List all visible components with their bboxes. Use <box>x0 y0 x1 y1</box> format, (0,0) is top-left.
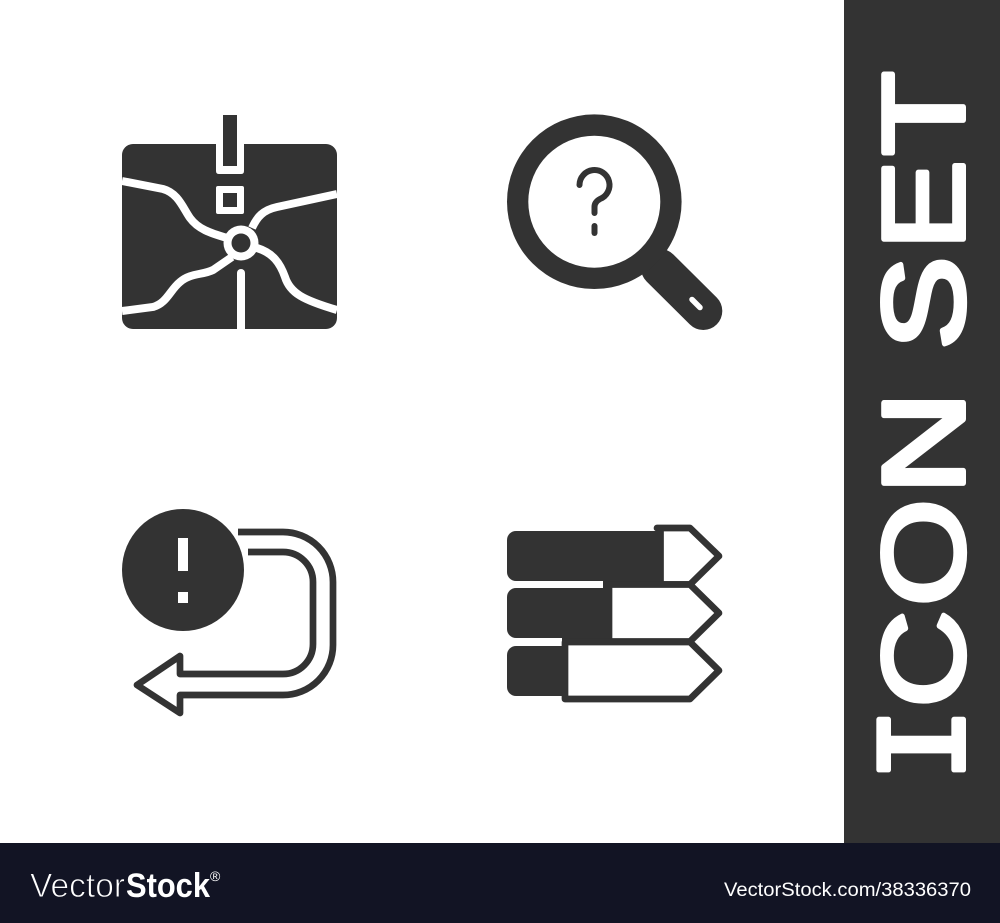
vertical title: E <box>858 160 988 250</box>
icon: stacked progress arrows <box>507 528 719 699</box>
image id url: VectorStock.com/38336370 <box>724 879 971 901</box>
vertical title: S <box>859 256 989 350</box>
vertical title: I <box>857 707 992 782</box>
vertical title: N <box>858 391 988 495</box>
vertical title: O <box>860 499 989 606</box>
icon: magnifying glass with question mark <box>507 114 703 311</box>
vertical title: C <box>858 610 988 708</box>
logo: VectorStock <box>30 867 221 905</box>
icon: alert circle with return arrow <box>122 509 333 713</box>
logo: VectorStock: Vector <box>30 867 125 905</box>
logo: VectorStock: Stock <box>126 867 210 905</box>
icon: road map with exclamation mark <box>122 115 337 329</box>
side panel: ICON SET <box>844 0 1000 843</box>
vertical title <box>857 71 992 782</box>
logo: VectorStock: ® <box>210 868 221 884</box>
footer bar <box>0 843 1000 923</box>
vertical title: T <box>860 71 989 156</box>
